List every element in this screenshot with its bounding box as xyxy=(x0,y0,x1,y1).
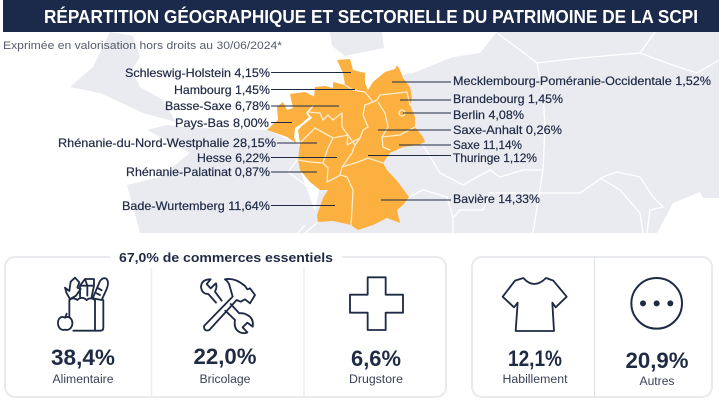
background map of Europe xyxy=(70,32,719,233)
Berlin xyxy=(399,110,405,116)
stat: Autres xyxy=(626,348,688,388)
label: Schleswig-Holstein: Schleswig-Holstein 4,15% xyxy=(125,66,270,80)
right labels xyxy=(368,74,711,206)
stat: Drugstore xyxy=(349,346,403,386)
Pays-Bas xyxy=(267,92,315,143)
label: Berlin xyxy=(403,108,524,122)
stat: Alimentaire: Alimentaire xyxy=(52,374,114,386)
label: Saxe: Saxe 11,14% xyxy=(453,138,522,152)
title: RÉPARTITION GÉOGRAPHIQUE ET SECTORIELLE DU PATRIMOINE DE LA SCPI xyxy=(44,6,698,27)
stat: Habillement: 12,1% xyxy=(508,346,562,371)
label: Bavière: Bavière 14,33% xyxy=(453,192,540,206)
stat: Habillement: Habillement xyxy=(502,374,568,386)
label: Berlin: Berlin 4,08% xyxy=(453,108,524,122)
icon: hammer and wrench xyxy=(201,279,255,333)
stat: Bricolage: 22,0% xyxy=(194,344,256,369)
label: Bade-Wurtemberg: Bade-Wurtemberg 11,64% xyxy=(122,199,270,213)
icon: grocery bag xyxy=(58,278,108,331)
label: Rhénanie-du-Nord-Westphalie: Rhénanie-du-Nord-Westphalie 28,15% xyxy=(58,136,276,150)
panel: autres secteurs xyxy=(472,256,712,397)
label: Saxe xyxy=(399,138,522,152)
label: Hesse xyxy=(197,151,337,165)
stat: Autres: Autres xyxy=(640,376,675,388)
stat: Drugstore: 6,6% xyxy=(351,346,401,371)
stat: Alimentaire xyxy=(51,345,115,386)
map of Germany xyxy=(267,59,425,230)
panel: commerces essentiels xyxy=(5,250,446,397)
left labels xyxy=(58,66,355,213)
stat: Bricolage xyxy=(194,344,256,386)
icon: t-shirt xyxy=(503,278,567,331)
label: Saxe-Anhalt: Saxe-Anhalt 0,26% xyxy=(453,123,562,137)
subtitle: Exprimée en valorisation hors droits au 30/06/2024* xyxy=(3,40,283,52)
label: Hambourg: Hambourg 1,45% xyxy=(174,83,270,97)
panel heading: 67,0% de commerces essentiels xyxy=(119,250,333,265)
label: Brandebourg: Brandebourg 1,45% xyxy=(453,92,563,106)
stat: Autres: 20,9% xyxy=(626,348,688,373)
label: Rhénanie-Palatinat: Rhénanie-Palatinat 0,87% xyxy=(126,165,270,179)
label: Basse-Saxe: Basse-Saxe 6,78% xyxy=(165,99,270,113)
stat: Alimentaire: 38,4% xyxy=(51,345,115,370)
header banner xyxy=(3,0,719,32)
label: Mecklembourg-Poméranie-Occidentale: Mecklembourg-Poméranie-Occidentale 1,52% xyxy=(453,74,711,88)
stat: Habillement xyxy=(502,346,568,386)
icon: cross xyxy=(350,277,403,330)
stat: Bricolage: Bricolage xyxy=(200,374,250,386)
stat: Drugstore: Drugstore xyxy=(349,374,403,386)
label: Thuringe: Thuringe 1,12% xyxy=(453,151,537,165)
label: Hesse: Hesse 6,22% xyxy=(197,151,270,165)
region borders xyxy=(298,85,415,225)
label: Pays-Bas: Pays-Bas 8,00% xyxy=(175,116,269,130)
icon: ellipsis circle xyxy=(631,278,682,329)
